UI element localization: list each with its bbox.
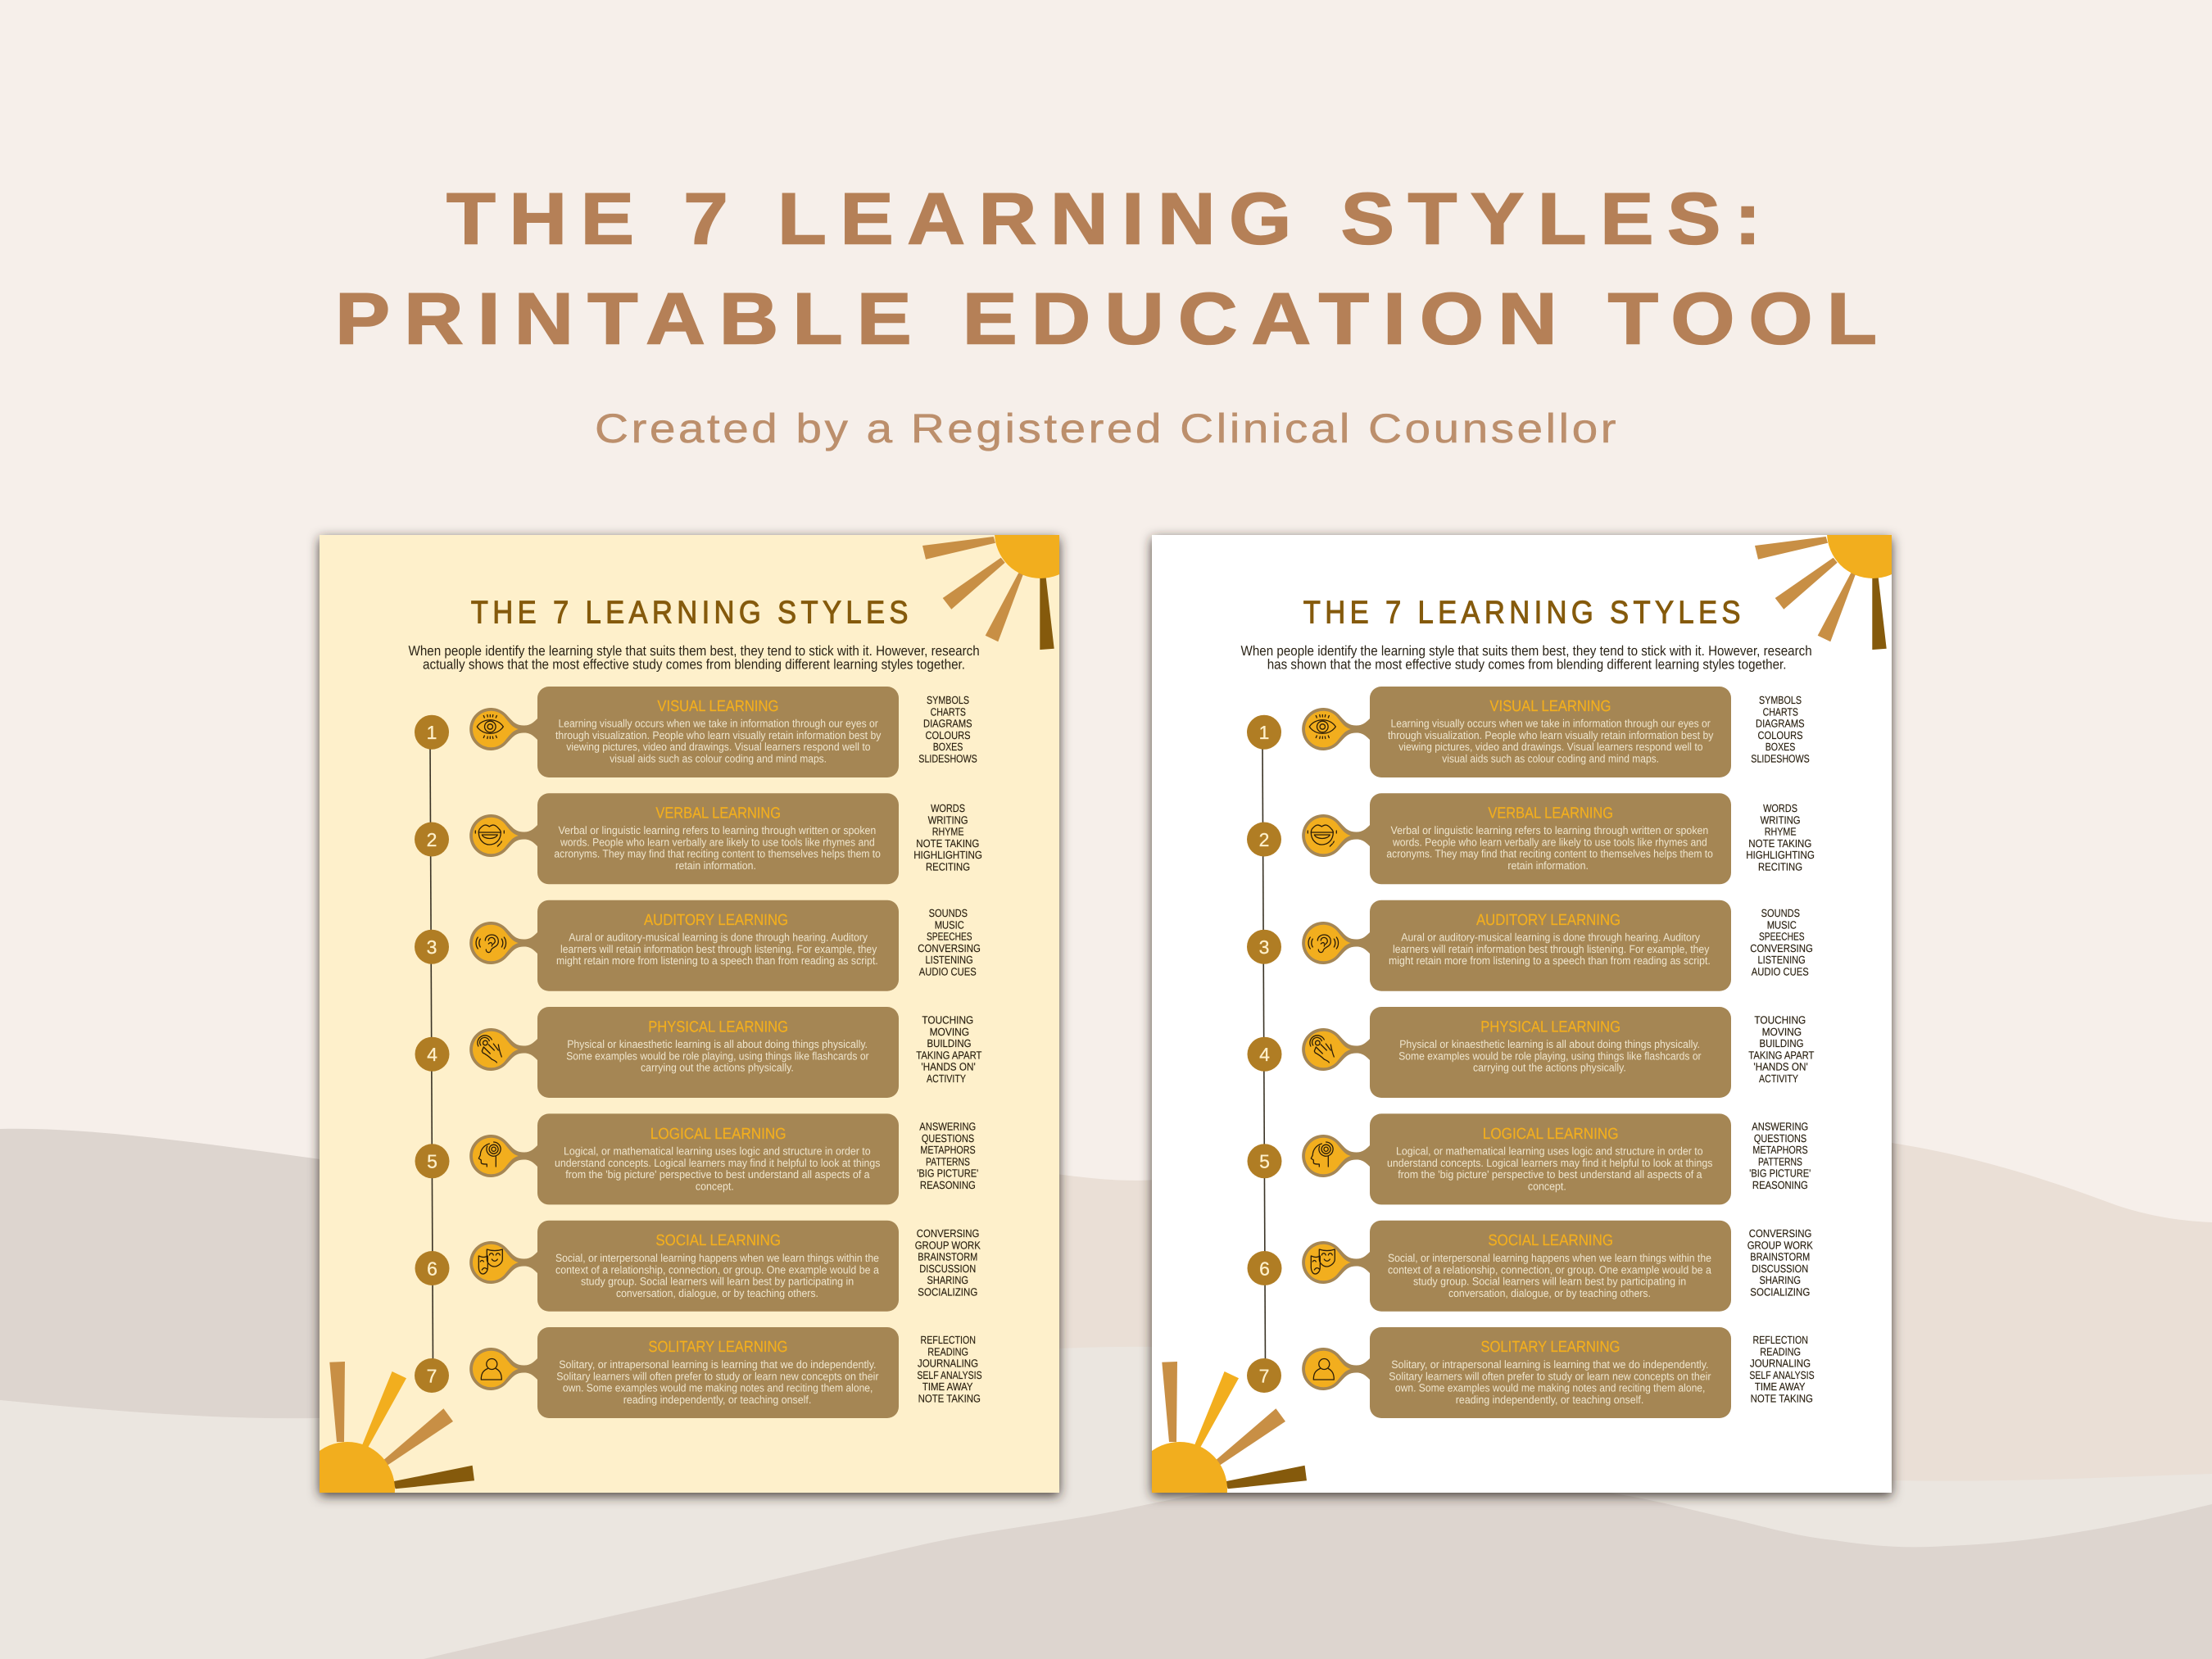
icon: eye	[1302, 708, 1370, 750]
keyword list: solitary: REFLECTION	[1753, 1334, 1808, 1346]
row 7: solitary learning	[1247, 1327, 1815, 1418]
poster sheet	[320, 535, 1059, 1493]
card text: solitary: reading independently, or teaching onself.	[623, 1394, 811, 1406]
number 2: 2	[427, 829, 437, 850]
keyword list: social: SHARING	[927, 1274, 968, 1286]
icon: ear	[1302, 922, 1370, 964]
row 1: visual learning	[1247, 687, 1810, 777]
card text: social: conversation, dialogue, or by teaching others.	[1448, 1287, 1651, 1299]
number 2	[415, 823, 449, 857]
keyword list: physical: TAKING APART	[916, 1049, 981, 1061]
keyword list: physical	[916, 1014, 981, 1085]
keyword list: visual: SYMBOLS	[927, 694, 969, 706]
card text: verbal: acronyms. They may find that reciting content to themselves helps them to	[1386, 848, 1713, 860]
background: bottom grey wave	[424, 1480, 2212, 1659]
keyword list: verbal: RECITING	[926, 860, 970, 873]
card text: social: Social, or interpersonal learning happens when we learn things within the	[555, 1252, 879, 1264]
sun: bottom left	[320, 1362, 474, 1493]
keyword list: auditory: SPEECHES	[1759, 931, 1805, 943]
keyword list: solitary	[1749, 1334, 1815, 1404]
keyword list: physical: 'HANDS ON'	[921, 1061, 976, 1073]
card title: solitary: SOLITARY LEARNING	[1480, 1339, 1620, 1356]
card text: logical: understand concepts. Logical learners may find it helpful to look at things	[1387, 1157, 1713, 1169]
card text: auditory: might retain more from listening to a speech than from reading as script.	[556, 954, 878, 967]
card text: social: context of a relationship, connection, or group. One example would be a	[555, 1263, 879, 1276]
keyword list: social: BRAINSTORM	[1750, 1251, 1810, 1263]
number 4	[415, 1037, 449, 1072]
number 5	[1247, 1144, 1281, 1178]
number 4: 4	[427, 1044, 437, 1065]
card: social	[537, 1221, 899, 1312]
keyword list: social: GROUP WORK	[915, 1239, 981, 1251]
keyword list: visual: CHARTS	[1763, 705, 1798, 718]
timeline line	[1262, 741, 1265, 1368]
keyword list: physical: MOVING	[930, 1026, 969, 1038]
card text: auditory: Aural or auditory-musical learning is done through hearing. Auditory	[569, 931, 868, 944]
number 6	[1247, 1251, 1281, 1285]
number 3: 3	[1259, 936, 1269, 958]
card text: social: context of a relationship, connection, or group. One example would be a	[1388, 1263, 1711, 1276]
row 4: physical learning	[1247, 1007, 1814, 1098]
keyword list: solitary: JOURNALING	[1750, 1358, 1811, 1370]
card title: social: SOCIAL LEARNING	[655, 1232, 781, 1249]
subtitle: Created by a Registered Clinical Counsellor	[595, 406, 1619, 451]
keyword list: logical: ANSWERING	[1752, 1121, 1808, 1132]
card text: logical	[1387, 1145, 1713, 1192]
card text: verbal: acronyms. They may find that reciting content to themselves helps them to	[554, 848, 881, 860]
card text: auditory	[556, 931, 878, 967]
row 3: auditory learning	[1247, 900, 1813, 991]
card text: logical: Logical, or mathematical learning uses logic and structure in order to	[564, 1145, 871, 1157]
card text: solitary: own. Some examples would me making notes and reciting them alone,	[563, 1382, 873, 1394]
keyword list: social: CONVERSING	[917, 1227, 979, 1240]
number 3: 3	[427, 936, 437, 958]
keyword list: logical	[917, 1121, 978, 1191]
sun: top right	[1755, 535, 1892, 650]
card: solitary	[537, 1327, 899, 1418]
number 6: 6	[427, 1258, 437, 1279]
keyword list: physical: BUILDING	[927, 1037, 972, 1049]
keyword list: solitary: TIME AWAY	[922, 1380, 973, 1393]
keyword list: logical: METAPHORS	[920, 1144, 976, 1156]
intro text: actually shows that the most effective study comes from blending different learning styles together.	[423, 657, 965, 673]
keyword list: auditory: MUSIC	[935, 918, 964, 931]
keyword list: logical: QUESTIONS	[922, 1132, 974, 1145]
keyword list: verbal: HIGHLIGHTING	[1746, 849, 1815, 861]
keyword list: social: BRAINSTORM	[918, 1251, 977, 1263]
card title: visual: VISUAL LEARNING	[1489, 698, 1611, 715]
keyword list: physical: MOVING	[1762, 1026, 1802, 1038]
number 4: 4	[1259, 1044, 1270, 1065]
number 1: 1	[1259, 722, 1269, 743]
card: visual	[1370, 687, 1731, 777]
card text: visual: viewing pictures, video and drawings. Visual learners respond well to	[566, 741, 871, 753]
card text: social	[1388, 1252, 1711, 1299]
keyword list: visual: BOXES	[933, 741, 963, 753]
keyword list: verbal: WORDS	[931, 802, 965, 814]
card text: visual: Learning visually occurs when we take in information through our eyes or	[1391, 718, 1711, 729]
keyword list: social	[1747, 1227, 1813, 1298]
card: logical	[537, 1113, 899, 1204]
card: verbal	[537, 793, 899, 884]
keyword list: logical: 'BIG PICTURE'	[1749, 1167, 1811, 1180]
icon: touching hand	[469, 1028, 537, 1071]
card text: logical: from the 'big picture' perspective to best understand all aspects of a	[565, 1168, 870, 1181]
keyword list: logical: PATTERNS	[1758, 1155, 1802, 1167]
keyword list: verbal: RHYME	[1765, 826, 1797, 838]
keyword list: auditory: LISTENING	[1758, 954, 1806, 966]
card title: social: SOCIAL LEARNING	[1488, 1232, 1613, 1249]
keyword list: physical: 'HANDS ON'	[1753, 1061, 1808, 1073]
main title	[335, 178, 1891, 359]
keyword list: solitary: JOURNALING	[918, 1358, 978, 1370]
number 5: 5	[1259, 1151, 1270, 1172]
card text: logical	[555, 1145, 881, 1192]
sun: bottom left	[1152, 1362, 1307, 1493]
card text: verbal: Verbal or linguistic learning refers to learning through written or spoken	[559, 824, 876, 836]
keyword list: logical: 'BIG PICTURE'	[917, 1167, 978, 1180]
number 5: 5	[427, 1151, 437, 1172]
card text: verbal: retain information.	[675, 859, 756, 872]
keyword list: logical: PATTERNS	[926, 1155, 970, 1167]
background: peach wave	[983, 1134, 2212, 1659]
row 6: social learning	[1247, 1221, 1813, 1312]
card text: auditory: might retain more from listening to a speech than from reading as script.	[1389, 954, 1711, 967]
card text: physical: Some examples would be role playing, using things like flashcards or	[1398, 1049, 1702, 1062]
sun: top right	[922, 535, 1059, 650]
card text: visual: through visualization. People who learn visually retain information best by	[1388, 729, 1714, 741]
number 1: 1	[427, 722, 437, 743]
keyword list: auditory: CONVERSING	[918, 942, 981, 954]
panel: white poster	[1142, 528, 1902, 1505]
row 2: verbal learning	[1247, 793, 1815, 884]
card title: physical: PHYSICAL LEARNING	[648, 1019, 788, 1036]
keyword list: physical	[1748, 1014, 1814, 1085]
timeline line	[430, 741, 433, 1368]
number 3	[415, 930, 449, 964]
card text: logical: concept.	[1528, 1180, 1566, 1192]
card: solitary	[1370, 1327, 1731, 1418]
number 2: 2	[1259, 829, 1269, 850]
number 1	[415, 715, 449, 750]
card title: verbal: VERBAL LEARNING	[655, 805, 781, 822]
keyword list: social: SOCIALIZING	[918, 1286, 977, 1298]
card text: logical: understand concepts. Logical learners may find it helpful to look at things	[555, 1157, 881, 1169]
icon: person	[469, 1348, 537, 1390]
card: verbal	[1370, 793, 1731, 884]
background: light sand wave	[0, 1347, 2212, 1659]
keyword list: visual: DIAGRAMS	[1756, 718, 1805, 730]
card text: logical: Logical, or mathematical learning uses logic and structure in order to	[1396, 1145, 1703, 1157]
keyword list: auditory: SPEECHES	[927, 931, 972, 943]
keyword list: visual: SLIDESHOWS	[1751, 752, 1810, 765]
card text: verbal: words. People who learn verbally are likely to use tools like rhymes and	[1392, 836, 1707, 848]
keyword list: solitary: READING	[1760, 1345, 1801, 1358]
keyword list: verbal: HIGHLIGHTING	[913, 849, 982, 861]
number 2	[1247, 823, 1281, 857]
card title: verbal: VERBAL LEARNING	[1488, 805, 1613, 822]
keyword list: visual: COLOURS	[1758, 729, 1803, 741]
keyword list: verbal	[913, 802, 982, 873]
card text: auditory: Aural or auditory-musical learning is done through hearing. Auditory	[1401, 931, 1700, 944]
icon: head with target	[469, 1135, 537, 1177]
card: logical	[1370, 1113, 1731, 1204]
icon: touching hand	[1302, 1028, 1370, 1071]
card text: visual: visual aids such as colour coding and mind maps.	[610, 752, 827, 764]
keyword list: physical: TOUCHING	[1754, 1014, 1806, 1026]
card: auditory	[537, 900, 899, 991]
keyword list: logical: ANSWERING	[919, 1121, 976, 1132]
row 5: logical learning	[415, 1113, 978, 1204]
keyword list: social: DISCUSSION	[1752, 1262, 1808, 1275]
keyword list: visual	[1751, 694, 1810, 765]
card text: solitary	[556, 1358, 879, 1406]
poster heading: THE 7 LEARNING STYLES	[471, 596, 913, 631]
keyword list: verbal: WRITING	[928, 814, 968, 826]
card text: auditory	[1389, 931, 1711, 967]
poster heading: THE 7 LEARNING STYLES	[1303, 596, 1745, 631]
keyword list: auditory	[918, 907, 981, 978]
keyword list: physical: ACTIVITY	[1759, 1072, 1798, 1085]
keyword list: physical: TOUCHING	[922, 1014, 973, 1026]
keyword list: logical	[1749, 1121, 1811, 1191]
card text: verbal: words. People who learn verbally are likely to use tools like rhymes and	[560, 836, 875, 848]
row 5: logical learning	[1247, 1113, 1811, 1204]
row 7: solitary learning	[415, 1327, 982, 1418]
keyword list: physical: TAKING APART	[1748, 1049, 1814, 1061]
keyword list: visual	[918, 694, 977, 765]
row 6: social learning	[415, 1221, 981, 1312]
keyword list: auditory: SOUNDS	[929, 907, 968, 919]
card text: verbal: Verbal or linguistic learning refers to learning through written or spoken	[1391, 824, 1708, 836]
keyword list: verbal	[1746, 802, 1815, 873]
keyword list: visual: BOXES	[1766, 741, 1796, 753]
keyword list: solitary: READING	[927, 1345, 968, 1358]
card text: visual: viewing pictures, video and drawings. Visual learners respond well to	[1398, 741, 1703, 753]
keyword list: social: DISCUSSION	[919, 1262, 976, 1275]
intro text: When people identify the learning style that suits them best, they tend to stick with it. However, research	[1240, 643, 1812, 659]
card title: auditory: AUDITORY LEARNING	[1476, 912, 1620, 929]
icon: eye	[469, 708, 537, 750]
card title: solitary: SOLITARY LEARNING	[648, 1339, 788, 1356]
card text: logical: concept.	[696, 1180, 734, 1192]
keyword list: verbal: WORDS	[1763, 802, 1797, 814]
keyword list: verbal: NOTE TAKING	[916, 837, 979, 850]
card title: logical: LOGICAL LEARNING	[1483, 1126, 1619, 1143]
card text: solitary	[1389, 1358, 1711, 1406]
keyword list: social	[915, 1227, 981, 1298]
icon: theatre masks	[469, 1241, 537, 1284]
keyword list: verbal: NOTE TAKING	[1748, 837, 1811, 850]
keyword list: social: SHARING	[1760, 1274, 1801, 1286]
card title: logical: LOGICAL LEARNING	[650, 1126, 786, 1143]
keyword list: solitary	[917, 1334, 982, 1404]
keyword list: visual: COLOURS	[926, 729, 971, 741]
keyword list: visual: SYMBOLS	[1759, 694, 1802, 706]
keyword list: auditory: CONVERSING	[1750, 942, 1813, 954]
card text: solitary: Solitary learners will often prefer to study or learn new concepts on their	[556, 1370, 879, 1382]
card title: visual: VISUAL LEARNING	[657, 698, 778, 715]
intro text	[1240, 643, 1812, 673]
icon: mouth	[1302, 814, 1370, 857]
card text: visual	[1388, 718, 1714, 764]
card text: social: study group. Social learners will learn best by participating in	[581, 1276, 854, 1288]
title line 1: THE 7 LEARNING STYLES:	[446, 178, 1775, 260]
keyword list: solitary: SELF ANALYSIS	[917, 1369, 982, 1381]
card text: social: study group. Social learners will learn best by participating in	[1413, 1276, 1686, 1288]
card: physical	[537, 1007, 899, 1098]
card text: visual: visual aids such as colour coding and mind maps.	[1442, 752, 1659, 764]
keyword list: solitary: NOTE TAKING	[1751, 1393, 1813, 1404]
card text: physical: carrying out the actions physically.	[641, 1062, 794, 1074]
keyword list: auditory: AUDIO CUES	[1752, 965, 1809, 978]
card text: visual: Learning visually occurs when we take in information through our eyes or	[559, 718, 878, 729]
row 1: visual learning	[415, 687, 977, 777]
keyword list: logical: REASONING	[920, 1179, 976, 1191]
keyword list: visual: DIAGRAMS	[923, 718, 972, 730]
card text: auditory: learners will retain information best through listening. For example, they	[1393, 943, 1710, 955]
keyword list: solitary: TIME AWAY	[1755, 1380, 1806, 1393]
card text: social: Social, or interpersonal learning happens when we learn things within the	[1388, 1252, 1711, 1264]
card text: logical: from the 'big picture' perspective to best understand all aspects of a	[1398, 1168, 1702, 1181]
card text: solitary: reading independently, or teaching onself.	[1456, 1394, 1643, 1406]
card text: verbal	[1386, 824, 1713, 872]
card text: solitary: Solitary learners will often prefer to study or learn new concepts on their	[1389, 1370, 1711, 1382]
number 7: 7	[427, 1365, 437, 1386]
number 7	[1247, 1358, 1281, 1393]
card: social	[1370, 1221, 1731, 1312]
card text: physical: carrying out the actions physically.	[1473, 1062, 1626, 1074]
card: visual	[537, 687, 899, 777]
keyword list: auditory: LISTENING	[926, 954, 973, 966]
background: left grey wave	[0, 1129, 410, 1420]
icon: theatre masks	[1302, 1241, 1370, 1284]
title line 2: PRINTABLE EDUCATION TOOL	[335, 277, 1891, 359]
card title: physical: PHYSICAL LEARNING	[1480, 1019, 1620, 1036]
card text: solitary: Solitary, or intrapersonal learning is learning that we do independently.	[1391, 1358, 1709, 1371]
icon: ear	[469, 922, 537, 964]
keyword list: solitary: NOTE TAKING	[918, 1393, 981, 1404]
keyword list: physical: BUILDING	[1760, 1037, 1804, 1049]
keyword list: logical: REASONING	[1752, 1179, 1808, 1191]
number 7	[415, 1358, 449, 1393]
card text: physical: Physical or kinaesthetic learning is all about doing things physically.	[567, 1038, 868, 1050]
card text: verbal	[554, 824, 881, 872]
number 7: 7	[1259, 1365, 1269, 1386]
number 1	[1247, 715, 1281, 750]
panel: cream poster	[310, 528, 1069, 1505]
keyword list: auditory: MUSIC	[1767, 918, 1797, 931]
card text: verbal: retain information.	[1507, 859, 1589, 872]
number 6: 6	[1259, 1258, 1270, 1279]
card text: physical	[1398, 1038, 1702, 1074]
card text: social: conversation, dialogue, or by teaching others.	[616, 1287, 818, 1299]
card: auditory	[1370, 900, 1731, 991]
keyword list: verbal: WRITING	[1761, 814, 1801, 826]
card text: physical	[566, 1038, 869, 1074]
keyword list: solitary: REFLECTION	[921, 1334, 976, 1346]
card text: visual: through visualization. People who learn visually retain information best by	[555, 729, 882, 741]
card text: solitary: own. Some examples would me making notes and reciting them alone,	[1395, 1382, 1705, 1394]
number 5	[415, 1144, 449, 1178]
number 3	[1247, 930, 1281, 964]
keyword list: verbal: RHYME	[932, 826, 964, 838]
number 6	[415, 1251, 449, 1285]
keyword list: verbal: RECITING	[1758, 860, 1802, 873]
icon: person	[1302, 1348, 1370, 1390]
keyword list: social: GROUP WORK	[1747, 1239, 1813, 1251]
intro text	[408, 643, 980, 673]
icon: mouth	[469, 814, 537, 857]
row 3: auditory learning	[415, 900, 981, 991]
poster sheet	[1152, 535, 1892, 1493]
keyword list: auditory: SOUNDS	[1761, 907, 1800, 919]
keyword list: logical: METAPHORS	[1752, 1144, 1808, 1156]
card title: auditory: AUDITORY LEARNING	[644, 912, 788, 929]
card text: auditory: learners will retain information best through listening. For example, they	[560, 943, 877, 955]
keyword list: visual: SLIDESHOWS	[918, 752, 977, 765]
card text: visual	[555, 718, 882, 764]
number 4	[1247, 1037, 1281, 1072]
row 4: physical learning	[415, 1007, 981, 1098]
keyword list: solitary: SELF ANALYSIS	[1749, 1369, 1815, 1381]
card text: solitary: Solitary, or intrapersonal learning is learning that we do independently.	[559, 1358, 877, 1371]
intro text: When people identify the learning style that suits them best, they tend to stick with it. However, research	[408, 643, 980, 659]
keyword list: social: SOCIALIZING	[1750, 1286, 1810, 1298]
keyword list: auditory	[1750, 907, 1813, 978]
card: physical	[1370, 1007, 1731, 1098]
keyword list: physical: ACTIVITY	[927, 1072, 966, 1085]
icon: head with target	[1302, 1135, 1370, 1177]
row 2: verbal learning	[415, 793, 982, 884]
card text: social	[555, 1252, 879, 1299]
keyword list: visual: CHARTS	[931, 705, 966, 718]
intro text: has shown that the most effective study comes from blending different learning styles together.	[1267, 657, 1786, 673]
keyword list: social: CONVERSING	[1749, 1227, 1811, 1240]
card text: physical: Some examples would be role playing, using things like flashcards or	[566, 1049, 869, 1062]
card text: physical: Physical or kinaesthetic learning is all about doing things physically.	[1399, 1038, 1700, 1050]
keyword list: auditory: AUDIO CUES	[919, 965, 977, 978]
keyword list: logical: QUESTIONS	[1754, 1132, 1806, 1145]
